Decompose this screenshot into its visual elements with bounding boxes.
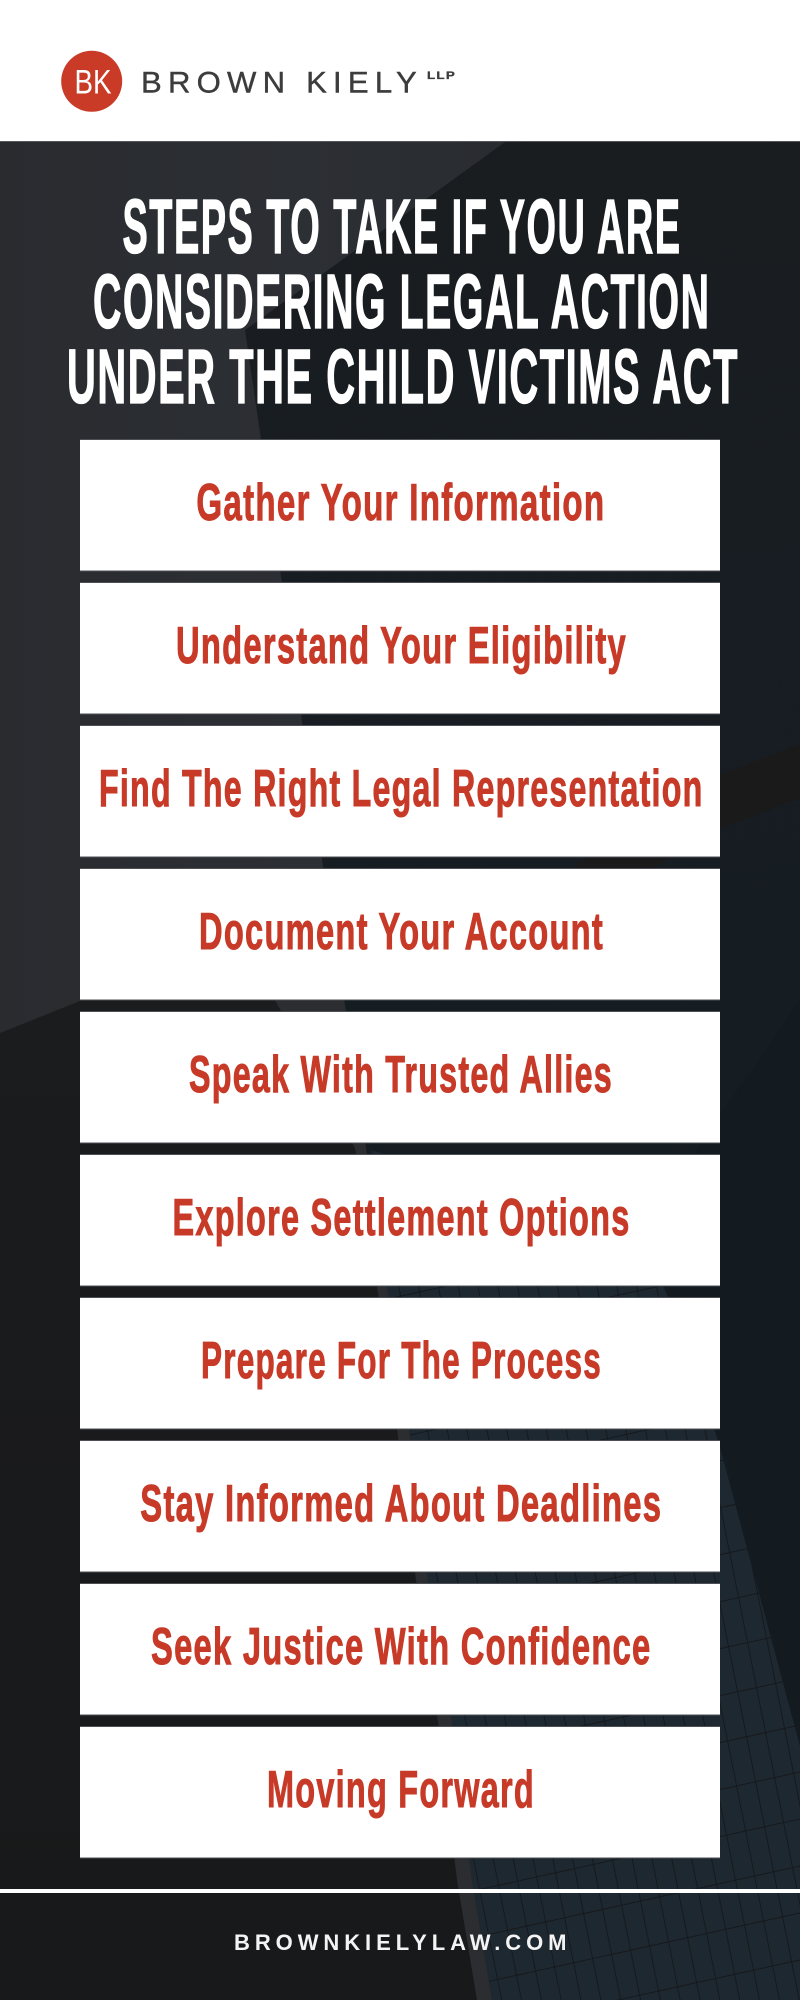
header band [0,0,800,141]
step 1 card [80,439,720,572]
step 10 card: Moving Forward [267,1761,535,1819]
step 5 card [80,1011,720,1144]
footer website address: BROWNKIELYLAW.COM [234,1930,566,1955]
logo wordmark: BROWN KIELY [141,66,423,100]
step 2 card [80,582,720,714]
logo: Brown Kiely LLP [61,51,456,112]
footer divider line [0,1889,800,1893]
step 8 card [80,1440,720,1572]
step 7 card [80,1297,720,1430]
icon: red BK circle [61,51,122,112]
step 6 card [80,1154,720,1286]
step 3 card [80,725,720,858]
icon: red BK circle: BK [74,64,112,102]
logo suffix LLP: LLP [427,70,456,82]
title [67,184,739,420]
step 10 card [80,1726,720,1858]
step 9 card [80,1583,720,1716]
step 4 card [80,868,720,1000]
